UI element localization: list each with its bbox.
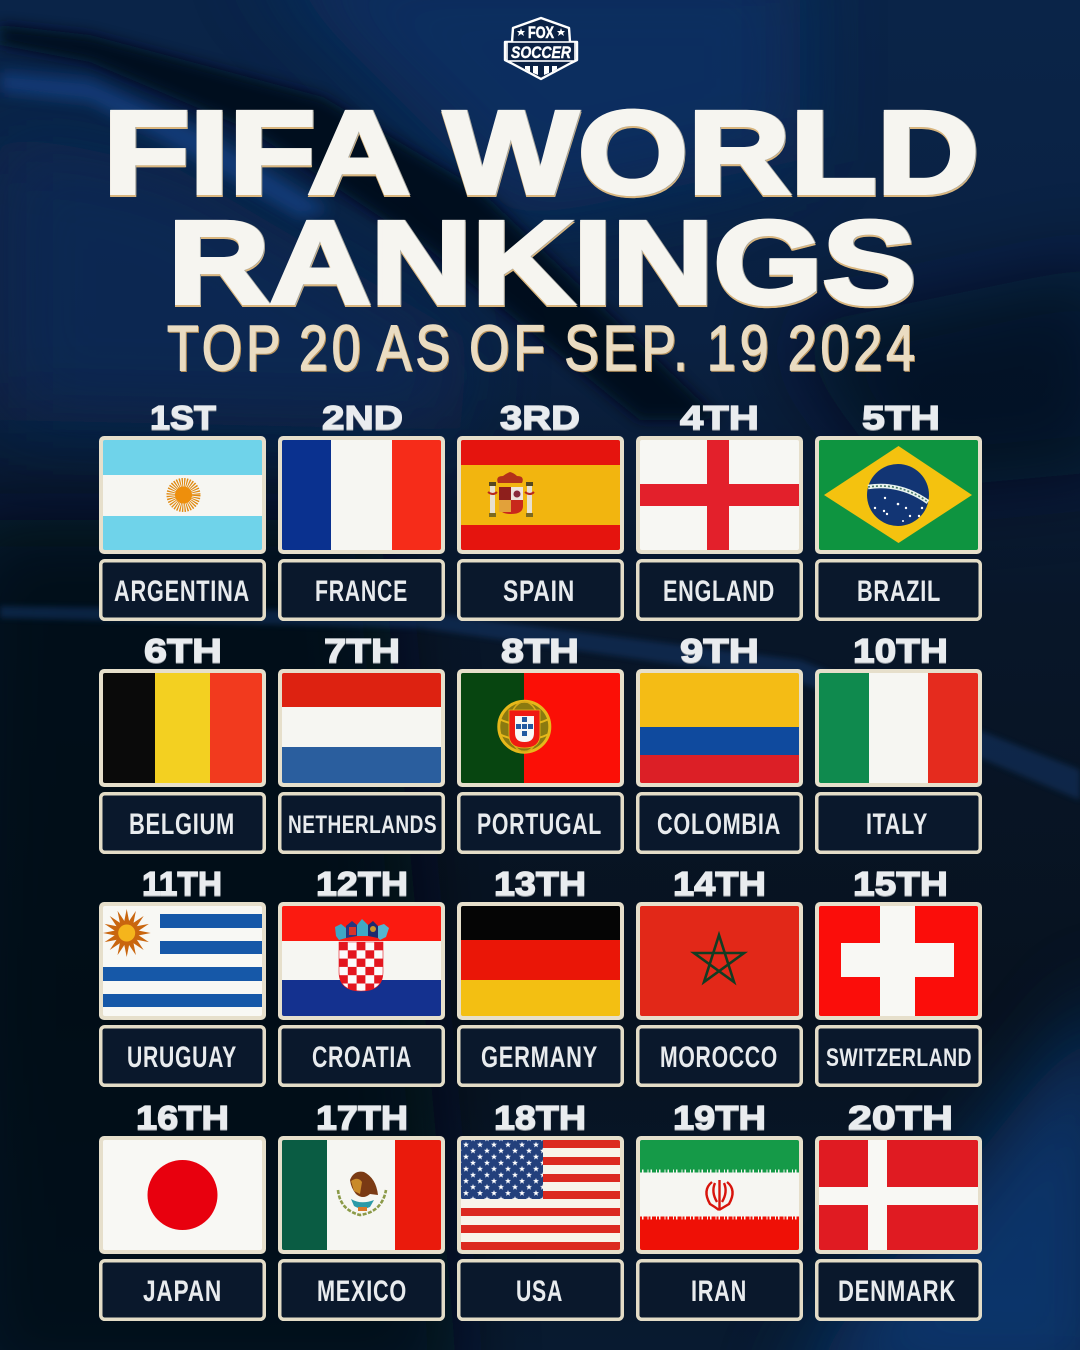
country name: [817, 561, 980, 619]
country name: [459, 1261, 622, 1319]
rank: 14TH: [673, 865, 766, 902]
flag: Denmark: [815, 1136, 982, 1254]
rank: 5TH: [862, 399, 940, 436]
flag: Portugal: [457, 669, 624, 787]
title: [103, 87, 979, 329]
panel: 4th England: [636, 399, 803, 619]
country name: [280, 794, 443, 852]
panel: 9th Colombia: [636, 632, 803, 852]
rank: 18TH: [494, 1099, 586, 1136]
country name: CROATIA: [312, 1041, 412, 1074]
country name: [638, 1261, 801, 1319]
country name: [280, 1261, 443, 1319]
rank: 3RD: [500, 399, 580, 436]
country name: [101, 794, 264, 852]
panel: 2nd France: [278, 399, 445, 619]
country name: BRAZIL: [857, 575, 941, 608]
panel: 16th Japan: [99, 1099, 266, 1319]
country name: [459, 794, 622, 852]
country name: [459, 1027, 622, 1085]
rank: 11TH: [142, 865, 222, 902]
country name: [101, 1027, 264, 1085]
country name: [817, 1027, 980, 1085]
flag: Japan: [99, 1136, 266, 1254]
panel: 20th Denmark: [815, 1099, 982, 1319]
country name: BELGIUM: [129, 808, 235, 841]
rank: 4TH: [680, 399, 759, 436]
country name: DENMARK: [838, 1275, 956, 1308]
panel: 19th Iran: [636, 1099, 803, 1319]
rank: 12TH: [316, 865, 408, 902]
panel: 14th Morocco: [636, 865, 803, 1085]
country name: ITALY: [866, 808, 928, 841]
flag: Iran: [636, 1136, 803, 1254]
rank: 9TH: [680, 632, 759, 669]
panel: 18th USA: [457, 1099, 624, 1319]
rank: 13TH: [494, 865, 586, 902]
country name: IRAN: [691, 1275, 747, 1308]
panel: 5th Brazil: [815, 399, 982, 619]
country name: MEXICO: [317, 1275, 407, 1308]
country name: [638, 794, 801, 852]
rank: 1ST: [150, 399, 216, 436]
country name: SPAIN: [503, 575, 575, 608]
flag: USA: [457, 1136, 624, 1254]
flag: Morocco: [636, 902, 803, 1020]
panel: 1st Argentina: [99, 399, 266, 619]
panel: 6th Belgium: [99, 632, 266, 852]
flag: Belgium: [99, 669, 266, 787]
panel: 7th Netherlands: [278, 632, 445, 852]
flag: Switzerland: [815, 902, 982, 1020]
panel: 8th Portugal: [457, 632, 624, 852]
flag: France: [278, 436, 445, 554]
subtitle: TOP 20 AS OF SEP. 19 2024: [167, 312, 919, 384]
country name: URUGUAY: [127, 1041, 237, 1074]
country name: [817, 1261, 980, 1319]
country name: COLOMBIA: [657, 808, 781, 841]
country name: [101, 1261, 264, 1319]
rank: 15TH: [853, 865, 948, 902]
rank: 8TH: [501, 632, 579, 669]
country name: [817, 794, 980, 852]
country name: JAPAN: [143, 1275, 222, 1308]
panel: 3rd Spain: [457, 399, 624, 619]
logo: Fox Soccer shield: FOX: [528, 23, 554, 42]
country name: USA: [516, 1275, 563, 1308]
logo: Fox Soccer shield: SOCCER: [511, 43, 572, 62]
country name: NETHERLANDS: [288, 811, 437, 839]
title: FIFA WORLD: [103, 87, 979, 219]
flag: Argentina: [99, 436, 266, 554]
country name: MOROCCO: [660, 1041, 778, 1074]
panel: 13th Germany: [457, 865, 624, 1085]
flag: Uruguay: [99, 902, 266, 1020]
country name: [638, 1027, 801, 1085]
country name: GERMANY: [481, 1041, 598, 1074]
flag: Netherlands: [278, 669, 445, 787]
flag: Spain: [457, 436, 624, 554]
flag: Colombia: [636, 669, 803, 787]
country name: [280, 561, 443, 619]
flag: Mexico: [278, 1136, 445, 1254]
rank: 7TH: [324, 632, 400, 669]
rank: 6TH: [144, 632, 222, 669]
country name: [101, 561, 264, 619]
country name: SWITZERLAND: [826, 1044, 972, 1072]
rank: 10TH: [853, 632, 948, 669]
panel: 12th Croatia: [278, 865, 445, 1085]
country name: [459, 561, 622, 619]
rank: 19TH: [673, 1099, 766, 1136]
country name: ARGENTINA: [114, 575, 250, 608]
flag: Croatia: [278, 902, 445, 1020]
panel: 15th Switzerland: [815, 865, 982, 1085]
panel: 10th Italy: [815, 632, 982, 852]
panel: 11th Uruguay: [99, 865, 266, 1085]
country name: PORTUGAL: [477, 808, 602, 841]
flag: Italy: [815, 669, 982, 787]
flag: Brazil: [815, 436, 982, 554]
rank: 16TH: [136, 1099, 229, 1136]
rank: 17TH: [316, 1099, 408, 1136]
country name: [638, 561, 801, 619]
rank: 20TH: [848, 1099, 953, 1136]
logo: Fox Soccer shield: [505, 18, 577, 79]
flag: Germany: [457, 902, 624, 1020]
country name: [280, 1027, 443, 1085]
country name: FRANCE: [315, 575, 408, 608]
country name: ENGLAND: [663, 575, 775, 608]
flag: England: [636, 436, 803, 554]
panel: 17th Mexico: [278, 1099, 445, 1319]
rank: 2ND: [322, 399, 403, 436]
title: RANKINGS: [168, 197, 916, 329]
